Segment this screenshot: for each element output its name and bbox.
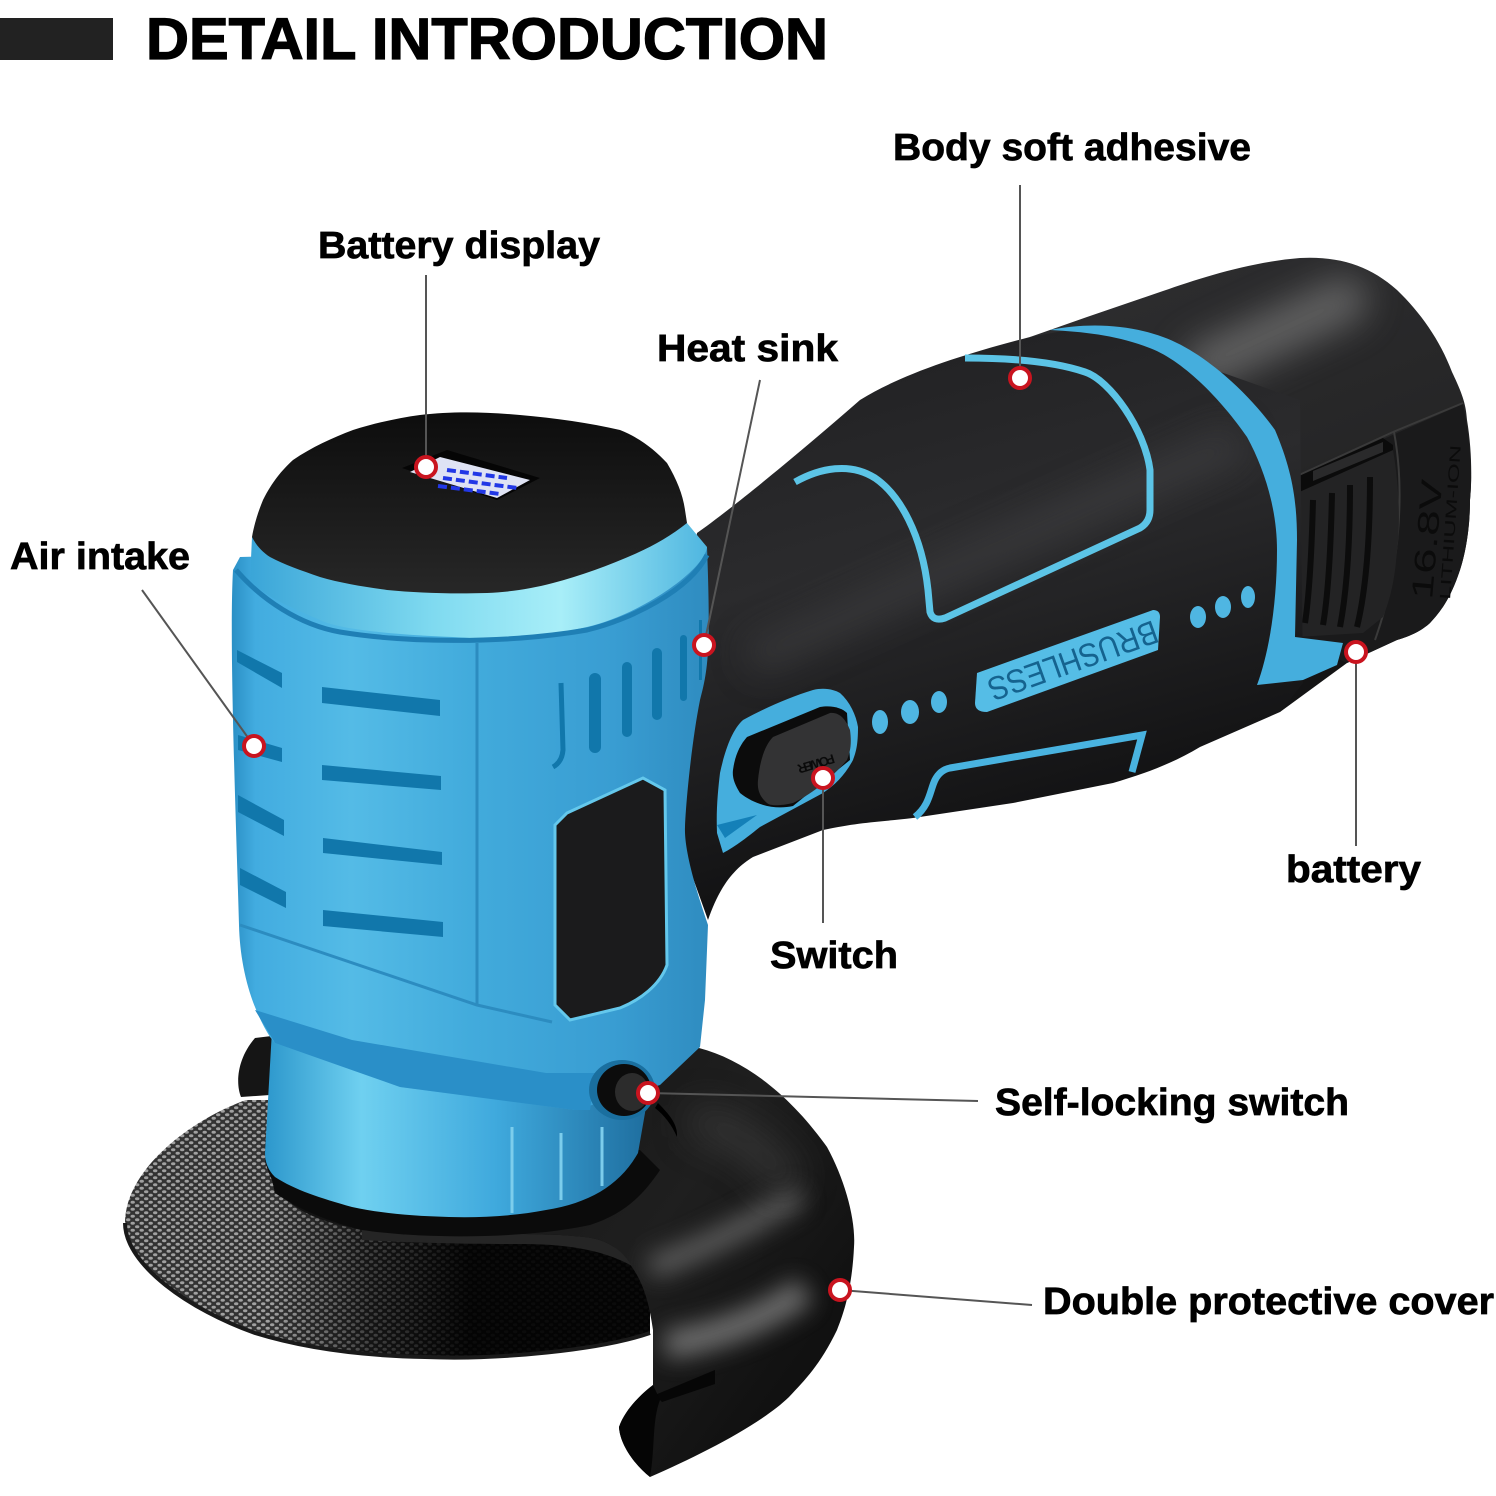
handle body <box>665 326 1303 920</box>
handle accent upper <box>795 358 1150 619</box>
side grip pad <box>555 778 667 1020</box>
battery release grip <box>1297 438 1399 637</box>
motor housing lower neck <box>265 1030 650 1217</box>
header bar <box>0 18 113 60</box>
collar ring <box>250 523 707 639</box>
battery pack <box>1030 258 1471 712</box>
housing panel seams <box>240 643 552 1022</box>
callout: body soft adhesive <box>893 127 1251 388</box>
brushless badge: BRUSHLESS <box>983 613 1163 708</box>
callout: air intake <box>10 536 264 756</box>
blue ring band <box>1050 326 1343 685</box>
callout: self-locking switch <box>638 1082 1349 1124</box>
power switch <box>717 689 858 853</box>
callout: switch <box>770 768 898 977</box>
handle accent lower <box>915 735 1142 817</box>
callout: battery: battery <box>1286 849 1421 891</box>
collar groove <box>236 555 707 640</box>
black collar under neck <box>265 1150 660 1236</box>
power switch: POWER <box>795 751 837 777</box>
top cap <box>252 412 687 593</box>
battery chemistry marking: LITHIUM-ION <box>1437 444 1465 600</box>
callout: battery display: Battery display <box>318 225 600 267</box>
rear clamp <box>238 1035 280 1100</box>
callout: battery <box>1286 642 1421 891</box>
product illustration: cordless angle grinder <box>125 258 1471 1477</box>
air intake slots <box>237 650 443 937</box>
callout: battery display <box>318 225 600 477</box>
callout: self-locking switch: Self-locking switch <box>995 1082 1349 1124</box>
title: DETAIL INTRODUCTION <box>146 7 828 72</box>
protective cover <box>265 1048 854 1477</box>
battery display screen <box>402 450 540 500</box>
callout: body soft adhesive: Body soft adhesive <box>893 127 1251 169</box>
callout: double protective cover: Double protective cover <box>1043 1281 1494 1323</box>
callout: air intake: Air intake <box>10 536 190 578</box>
battery voltage marking: 16.8V <box>1406 478 1449 601</box>
housing lower band <box>255 1010 595 1110</box>
callout: heat sink: Heat sink <box>657 328 839 370</box>
cutting disc <box>125 1100 650 1358</box>
self-locking button <box>589 1060 655 1120</box>
callout: switch: Switch <box>770 935 898 977</box>
handle dots <box>872 586 1255 734</box>
callout: double protective cover <box>830 1280 1494 1323</box>
heat sink slots <box>553 620 702 767</box>
motor housing <box>232 547 709 1110</box>
callout: heat sink <box>657 328 839 655</box>
